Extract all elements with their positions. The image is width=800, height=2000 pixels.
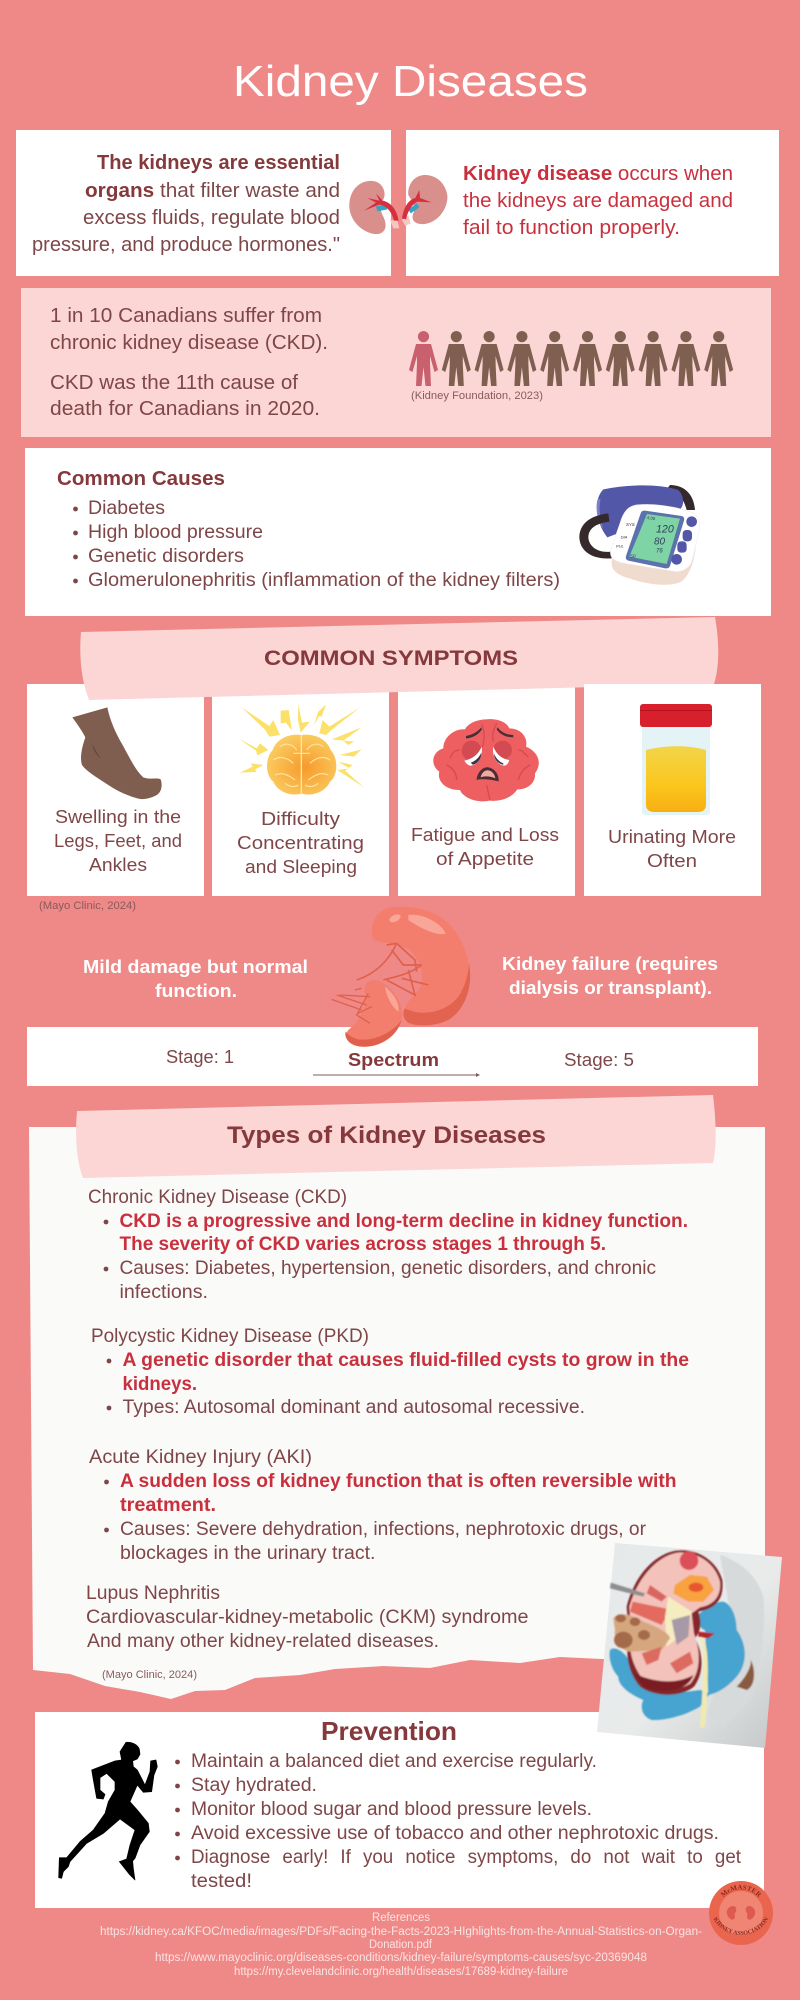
panel: what kidneys do: organs that filter waste and (85, 180, 340, 202)
icon: blood pressure monitor: SYS (626, 522, 635, 527)
panel: what kidneys do (16, 130, 391, 276)
text block: AKI (89, 1447, 676, 1564)
arrow: spectrum (313, 1073, 480, 1077)
icon: blood pressure monitor: 80 (654, 537, 666, 548)
panel: statistics: death for Canadians in 2020. (50, 398, 320, 420)
references: https://kidney.ca/KFOC/media/images/PDFs/Facing-the-Facts-2023-HIghlights-from-the-Annual-Statistics-on-Organ- (100, 1926, 702, 1938)
panel: prevention (35, 1712, 764, 1908)
card: swelling: Swelling in the (55, 807, 181, 827)
text: stage one description: Mild damage but normal (83, 956, 308, 977)
panel: prevention: Diagnose early! If you notice symptoms, do not wait to get (191, 1847, 742, 1868)
heading banner: types (76, 1095, 716, 1178)
icon: blood pressure monitor: 50 (630, 554, 636, 560)
icon: large kidney (332, 907, 470, 1047)
references: Donation.pdf (369, 1939, 433, 1951)
card: concentrating: Concentrating (237, 833, 364, 853)
card: concentrating: and Sleeping (245, 857, 357, 877)
badge: kidney association logo: KIDNEY ASSOCIATION (714, 1916, 768, 1935)
panel: what kidneys do: pressure, and produce hormones." (32, 234, 340, 256)
icon: brain with lightning bolts (238, 704, 364, 795)
references: https://www.mayoclinic.org/diseases-conditions/kidney-failure/symptoms-causes/syc-20369048 (155, 1952, 647, 1964)
citation: Mayo Clinic symptoms: (Mayo Clinic, 2024) (39, 900, 136, 912)
panel: common causes: Glomerulonephritis (inflammation of the kidney filters) (88, 570, 560, 591)
panel: prevention: Avoid excessive use of tobacco and other nephrotoxic drugs. (191, 1823, 719, 1844)
references: References (372, 1912, 430, 1924)
icon: running person (59, 1742, 157, 1880)
icon: blood pressure monitor: PUL (616, 544, 624, 549)
panel: what kidneys do: The kidneys are essential (97, 152, 340, 174)
panel: prevention: Stay hydrated. (191, 1775, 317, 1796)
text block: PKD: Types: Autosomal dominant and autosomal recessive. (122, 1397, 585, 1418)
text block: CKD (88, 1187, 688, 1303)
icon: blood pressure monitor: DIA (621, 535, 628, 540)
text block: AKI: A sudden loss of kidney function that is often reversible with (120, 1471, 676, 1492)
badge: kidney association logo: McMASTER (720, 1884, 761, 1898)
panel: kidney disease definition (406, 130, 779, 276)
photo: kidney model held in gloved hand (597, 1543, 782, 1748)
text: stage one description: function. (155, 980, 237, 1001)
text block: AKI: Causes: Severe dehydration, infections, nephrotoxic drugs, or (120, 1519, 647, 1540)
card: concentrating: Difficulty (261, 809, 340, 829)
card: swelling (27, 684, 204, 896)
text block: PKD: A genetic disorder that causes fluid-filled cysts to grow in the (122, 1350, 689, 1371)
text block: PKD (91, 1326, 689, 1418)
text: stage one description (83, 956, 308, 1001)
card: fatigue: Fatigue and Loss (411, 825, 559, 845)
text: stage five description: Kidney failure (requires (502, 953, 718, 974)
panel: common causes: Common Causes (57, 468, 225, 490)
panel: kidney disease definition: Kidney disease occurs when (463, 163, 733, 185)
text block: other diseases: Lupus Nephritis (86, 1583, 220, 1604)
card: fatigue (398, 684, 575, 896)
heading banner: types: Types of Kidney Diseases (227, 1122, 546, 1149)
citation: Kidney Foundation: (Kidney Foundation, 2023) (411, 390, 543, 402)
text block: CKD: CKD is a progressive and long-term decline in kidney function. (120, 1211, 688, 1232)
heading banner: common symptoms (80, 617, 718, 700)
panel: prevention: tested! (191, 1871, 252, 1892)
panel: spectrum bar (27, 1027, 758, 1086)
panel: common causes: Diabetes (88, 498, 165, 519)
text block: AKI: blockages in the urinary tract. (120, 1543, 376, 1564)
text block: PKD: Polycystic Kidney Disease (PKD) (91, 1326, 369, 1347)
panel: prevention: Monitor blood sugar and blood pressure levels. (191, 1799, 592, 1820)
text block: other diseases: And many other kidney-related diseases. (87, 1631, 439, 1652)
card: urinating: Urinating More (608, 827, 736, 847)
text block: CKD: Chronic Kidney Disease (CKD) (88, 1187, 347, 1208)
panel: statistics: 1 in 10 Canadians suffer from (50, 305, 322, 327)
text block: CKD: infections. (120, 1282, 208, 1303)
panel: kidney disease definition: the kidneys are damaged and (463, 190, 733, 212)
icon: blood pressure monitor: 4:00 (647, 515, 656, 521)
card: fatigue: of Appetite (436, 849, 534, 869)
panel: common causes: High blood pressure (88, 522, 263, 543)
title: Kidney Diseases (233, 57, 588, 106)
references: https://my.clevelandclinic.org/health/diseases/17689-kidney-failure (234, 1966, 568, 1978)
panel: kidney disease definition: fail to function properly. (463, 217, 680, 239)
icon: tired brain face (433, 719, 539, 801)
card: swelling: Legs, Feet, and (54, 831, 182, 851)
heading banner: common symptoms: COMMON SYMPTOMS (264, 647, 518, 670)
icon: blood pressure monitor (579, 485, 700, 585)
text: stage five description (502, 953, 718, 998)
card: urinating (584, 684, 761, 896)
text: stage five description: dialysis or transplant). (509, 977, 712, 998)
panel: common causes: Genetic disorders (88, 546, 244, 567)
panel: prevention: Maintain a balanced diet and exercise regularly. (191, 1751, 597, 1772)
card: urinating: Often (647, 851, 697, 871)
icon: row of ten people (409, 331, 733, 386)
panel: types of kidney diseases (29, 1095, 765, 1699)
panel: spectrum bar: Stage: 5 (564, 1050, 634, 1070)
card: swelling: Ankles (89, 855, 147, 875)
text block: PKD: kidneys. (122, 1374, 197, 1395)
text block: AKI: treatment. (120, 1495, 216, 1516)
panel: statistics (21, 288, 771, 437)
panel: spectrum bar: Stage: 1 (166, 1047, 234, 1067)
badge: kidney association logo (709, 1881, 773, 1945)
text block: CKD: Causes: Diabetes, hypertension, genetic disorders, and chronic (120, 1258, 656, 1279)
icon: blood pressure monitor: 76 (656, 549, 663, 555)
text block: CKD: The severity of CKD varies across stages 1 through 5. (120, 1234, 606, 1255)
card: concentrating (212, 684, 389, 896)
text block: other diseases: Cardiovascular-kidney-metabolic (CKM) syndrome (86, 1607, 528, 1628)
panel: what kidneys do: excess fluids, regulate blood (83, 207, 340, 229)
citation: Mayo Clinic types: (Mayo Clinic, 2024) (102, 1669, 197, 1681)
panel: spectrum bar: Spectrum (348, 1050, 439, 1070)
icon: blood pressure monitor: 120 (656, 523, 674, 535)
references (100, 1912, 702, 1978)
panel: prevention: Prevention (321, 1716, 457, 1746)
text block: AKI: Acute Kidney Injury (AKI) (89, 1447, 312, 1468)
panel: statistics: chronic kidney disease (CKD). (50, 332, 328, 354)
icon: foot (72, 707, 162, 799)
icon: pair of kidneys (349, 175, 447, 234)
icon: urine sample jar (640, 704, 712, 815)
panel: statistics: CKD was the 11th cause of (50, 372, 298, 394)
text block: other diseases (86, 1583, 528, 1652)
panel: common causes (25, 448, 771, 616)
